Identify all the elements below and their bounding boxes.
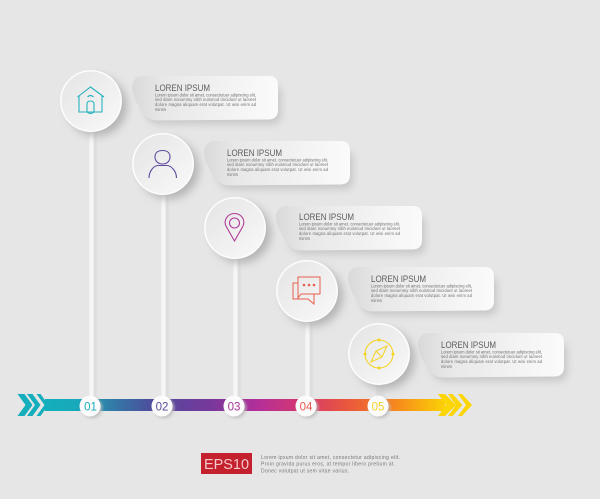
body text: minim [299, 236, 311, 241]
body text: minim [227, 172, 239, 177]
body text: minim [155, 107, 167, 112]
heading: LOREN IPSUM [155, 83, 210, 93]
panel: step 2 [204, 141, 353, 189]
number badge 05 [368, 396, 390, 418]
disc: step 2 [132, 133, 199, 199]
body text: Lorem ipsum dolor sit amet, consectetuer adipiscing elit, [227, 157, 328, 162]
number badge 01 [80, 396, 102, 418]
number badge 03 [224, 396, 246, 418]
panel: step 4 [348, 267, 497, 315]
body text: dolore magna aliquam erat volutpat. Ut wisi enim ad [299, 231, 401, 236]
footer text: Lorem ipsum dolor sit amet, consectetur adipiscing elit. [261, 455, 400, 461]
body text [155, 92, 257, 112]
heading: LOREN IPSUM [441, 340, 496, 350]
body text [371, 283, 473, 303]
panel: step 5 [418, 333, 567, 381]
icon: map pin [225, 214, 244, 241]
panel: step 1 [132, 76, 281, 124]
body text: Lorem ipsum dolor sit amet, consectetuer adipiscing elit, [299, 221, 400, 226]
disc: step 4 [276, 260, 343, 326]
EPS10 badge: EPS10 [204, 456, 249, 473]
body text: sed diam nonummy nibh euismod tincidunt ut laoreet [155, 97, 257, 102]
gradient bar [45, 399, 445, 411]
icon: home [78, 87, 104, 114]
number badge 02 [152, 396, 174, 418]
body text [227, 157, 329, 177]
left chevrons [18, 394, 48, 416]
step 5 pole [376, 382, 384, 401]
body text: Lorem ipsum dolor sit amet, consectetuer adipiscing elit, [371, 283, 472, 288]
right chevrons [438, 394, 472, 416]
number badge 01: 01 [84, 402, 97, 414]
icon: chat bubbles [293, 277, 320, 304]
footer text: Proin gravida purus eros, at tempor libero pretium at. [261, 462, 395, 468]
body text: sed diam nonummy nibh euismod tincidunt ut laoreet [299, 226, 401, 231]
footer text [261, 455, 400, 474]
step 3 pole [232, 254, 240, 401]
number badge 02: 02 [156, 402, 168, 414]
timeline arrow [18, 394, 472, 416]
icon: person [149, 150, 176, 178]
body text: minim [441, 364, 453, 369]
body text: dolore magna aliquam erat volutpat. Ut wisi enim ad [227, 167, 329, 172]
body text: sed diam nonummy nibh euismod tincidunt ut laoreet [441, 354, 543, 359]
number badge 05: 05 [372, 402, 384, 414]
body text [441, 349, 543, 369]
body text: minim [371, 298, 383, 303]
body text: dolore magna aliquam erat volutpat. Ut wisi enim ad [155, 102, 257, 107]
body text: dolore magna aliquam erat volutpat. Ut wisi enim ad [371, 293, 473, 298]
heading: LOREN IPSUM [299, 212, 354, 222]
disc: step 3 [204, 197, 271, 263]
number badge 03: 03 [228, 402, 240, 414]
body text: sed diam nonummy nibh euismod tincidunt ut laoreet [371, 288, 473, 293]
body text: sed diam nonummy nibh euismod tincidunt ut laoreet [227, 162, 329, 167]
step 1 pole [88, 125, 96, 401]
step 2 pole [160, 190, 168, 401]
step 4 pole [304, 318, 312, 401]
icon: compass [364, 339, 394, 369]
disc: step 5 [348, 323, 415, 389]
body text [299, 221, 401, 241]
footer text: Donec volutpat ut sem vitae varius. [261, 468, 349, 474]
body text: dolore magna aliquam erat volutpat. Ut wisi enim ad [441, 359, 543, 364]
heading: LOREN IPSUM [227, 148, 282, 158]
number badge 04 [296, 396, 318, 418]
body text: Lorem ipsum dolor sit amet, consectetuer adipiscing elit, [155, 92, 256, 97]
panel: step 3 [276, 206, 425, 254]
body text: Lorem ipsum dolor sit amet, consectetuer adipiscing elit, [441, 349, 542, 354]
heading: LOREN IPSUM [371, 274, 426, 284]
number badge 04: 04 [300, 402, 313, 414]
disc: step 1 [60, 70, 127, 136]
